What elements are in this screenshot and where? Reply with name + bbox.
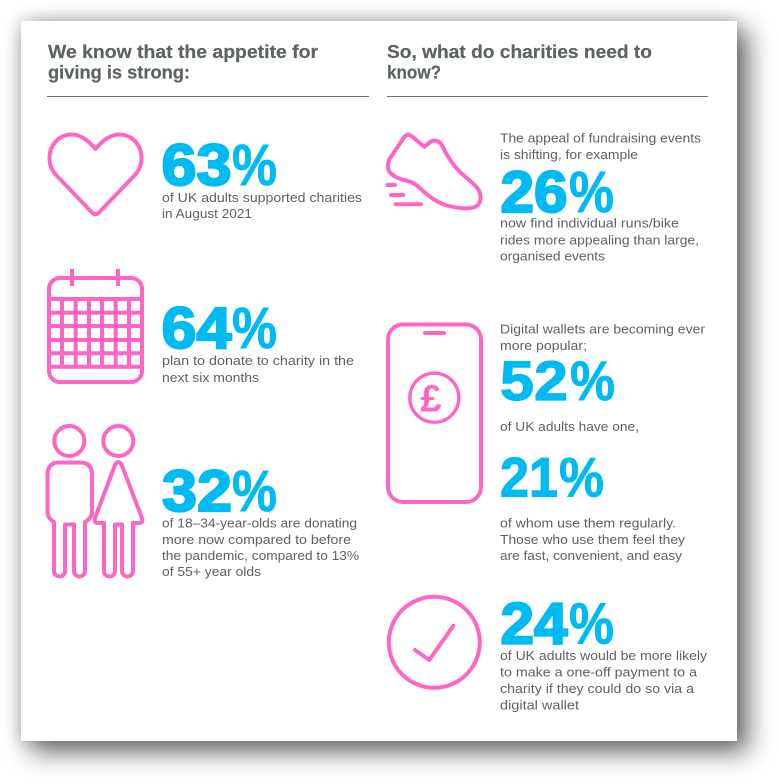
stat: 26%: organised events xyxy=(500,249,605,264)
stat: 24% xyxy=(500,592,707,712)
stat: 26%: rides more appealing than large, xyxy=(500,232,699,247)
stat: 21%: % xyxy=(559,446,604,509)
stat: 52%: of UK adults have one, xyxy=(500,419,639,434)
stat: 64% xyxy=(162,296,354,385)
heading: what charities need to know xyxy=(387,42,708,96)
stat: 63%: 63 xyxy=(162,133,232,198)
stat: 32% xyxy=(162,459,359,579)
heading: appetite for giving: We know that the appetite for xyxy=(48,42,318,62)
stat: 24%: to make a one-off payment to a xyxy=(500,665,698,680)
heading: appetite for giving xyxy=(47,42,369,96)
stat: 52%: % xyxy=(570,349,615,412)
stat: 21%: of whom use them regularly. xyxy=(500,515,676,530)
stat: 64%: plan to donate to charity in the xyxy=(162,353,354,368)
stat: 21% xyxy=(500,446,685,563)
heading: appetite for giving: giving is strong: xyxy=(48,62,190,82)
stat: 32%: 32 xyxy=(162,459,232,524)
icon: running shoe xyxy=(388,135,481,208)
stat: 64%: 64 xyxy=(162,296,232,361)
icon: phone with pound coin xyxy=(388,324,481,502)
stat: 63%: % xyxy=(232,133,277,198)
heading: what charities need to know: know? xyxy=(387,62,441,82)
stat: 21%: 21 xyxy=(500,446,558,509)
stat: 24%: % xyxy=(569,592,614,656)
stat: 52% xyxy=(500,321,706,434)
icon: calendar xyxy=(49,269,142,382)
stat: 26%: is shifting, for example xyxy=(500,147,638,162)
stat: 32%: % xyxy=(232,459,277,524)
stat: 32%: of 55+ year olds xyxy=(162,564,261,579)
stat: 26%: % xyxy=(569,160,614,225)
stat: 24%: 24 xyxy=(500,592,568,656)
stat: 64%: next six months xyxy=(162,370,259,385)
heading: what charities need to know: So, what do charities need to xyxy=(387,42,652,62)
icon: two people xyxy=(48,426,142,576)
stat: 63%: in August 2021 xyxy=(162,206,252,221)
icon: phone with pound coin: £ xyxy=(420,378,442,420)
stat: 32%: more now compared to before xyxy=(162,532,351,547)
stat: 26%: 26 xyxy=(500,160,568,225)
stat: 32%: of 18–34-year-olds are donating xyxy=(162,516,357,530)
stat: 52%: Digital wallets are becoming ever xyxy=(500,321,706,336)
stat: 63% xyxy=(162,133,362,221)
stat: 64%: % xyxy=(232,296,277,361)
stat: 24%: digital wallet xyxy=(500,698,579,712)
icon: check mark in circle xyxy=(389,597,480,688)
stat: 21%: are fast, convenient, and easy xyxy=(500,548,682,563)
stat: 52%: more popular; xyxy=(500,338,587,353)
stat: 26% xyxy=(500,131,701,264)
stat: 63%: of UK adults supported charities xyxy=(162,190,362,205)
stat: 32%: the pandemic, compared to 13% xyxy=(162,548,359,563)
stat: 26%: The appeal of fundraising events xyxy=(500,131,701,146)
stat: 52%: 52 xyxy=(500,349,568,412)
stat: 24%: charity if they could do so via a xyxy=(500,681,695,696)
stat: 21%: Those who use them feel they xyxy=(500,532,685,547)
stat: 24%: of UK adults would be more likely xyxy=(500,648,707,663)
stat: 26%: now find individual runs/bike xyxy=(500,216,679,231)
icon: heart xyxy=(50,134,142,214)
